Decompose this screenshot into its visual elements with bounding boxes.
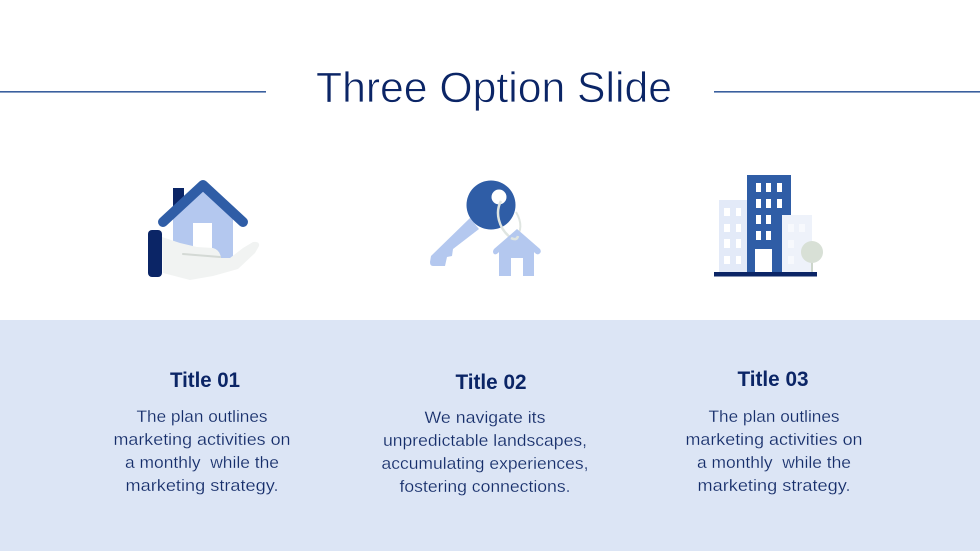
title: Three Option Slide [316,64,672,112]
text block: option 3: marketing strategy. [698,476,850,495]
text block: option 1: Title 01 [170,369,240,392]
text block: option 1: a monthly while the [125,453,279,472]
text block: option 1: marketing strategy. [126,476,278,495]
text block: option 3: Title 03 [738,368,808,391]
text block: option 2: We navigate its [424,408,546,427]
text block: option 3 [686,368,862,495]
text block: option 2 [382,371,588,496]
text block: option 2: Title 02 [456,371,526,394]
text block: option 2: fostering connections. [400,477,570,496]
text block: option 1: The plan outlines [136,407,268,426]
text block: option 2: accumulating experiences, [382,454,588,473]
icon: city buildings [714,175,823,276]
text block: option 2: unpredictable landscapes, [383,431,587,450]
icon: key with house keychain [430,180,541,276]
text block: option 3: marketing activities on [686,430,862,449]
panel: lower band [0,320,980,551]
text block: option 1 [114,369,290,495]
icon: house in hand [148,185,259,280]
text block: option 1: marketing activities on [114,430,290,449]
text block: option 3: a monthly while the [697,453,851,472]
text block: option 3: The plan outlines [708,407,840,426]
